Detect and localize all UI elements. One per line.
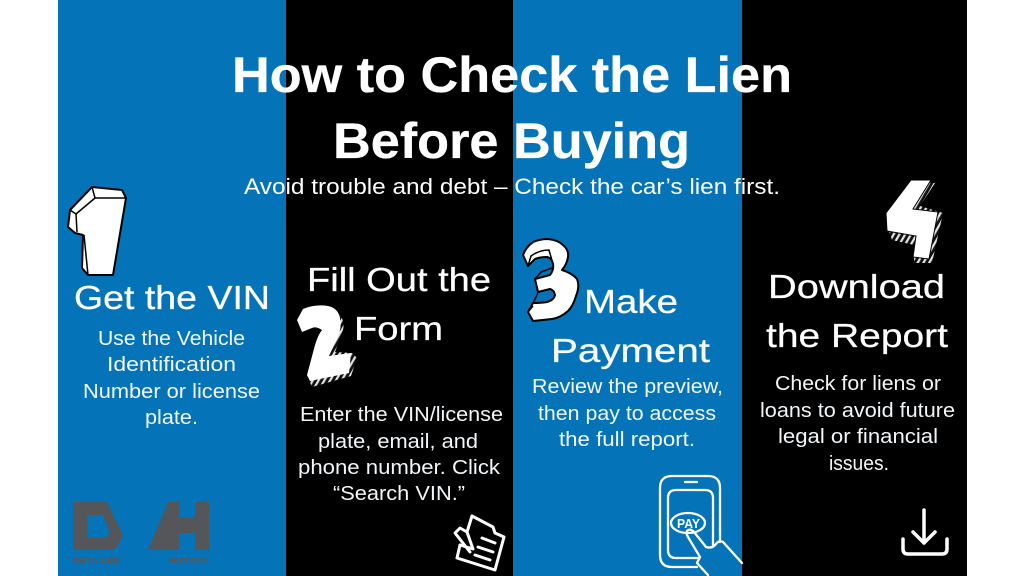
heading: Fill Out the Form — [307, 262, 491, 348]
text: step 4 description: issues. — [829, 452, 889, 475]
text: step 2 description: plate, email, and — [318, 430, 478, 453]
panel: step 4 content — [760, 180, 955, 554]
text: step 1 description: plate. — [145, 406, 198, 429]
icon: download — [903, 510, 947, 554]
text: step 1 description: Use the Vehicle — [98, 327, 245, 350]
text: step 4 description: legal or financial — [778, 425, 938, 448]
icon: number 3 — [523, 239, 578, 321]
text: step 2 description: phone number. Click — [298, 456, 501, 479]
heading: Download the Report: Download — [768, 269, 945, 306]
panel: step 3 background — [513, 0, 742, 576]
text: step 1 description: Number or license — [83, 380, 260, 403]
text: step 1 description — [83, 327, 260, 429]
title — [232, 47, 792, 169]
icon: documents — [455, 516, 504, 570]
heading: Fill Out the Form: Fill Out the — [307, 262, 491, 299]
text: step 3 description: the full report. — [559, 428, 695, 451]
text: step 1 description: Identification — [107, 353, 236, 376]
heading: Download the Report: the Report — [766, 318, 949, 355]
panel: step 1 background — [58, 0, 286, 576]
icon: number 1 — [68, 187, 126, 275]
text: step 3 description — [532, 375, 723, 451]
text: step 3 description: then pay to access — [538, 402, 716, 425]
text: step 4 description: loans to avoid future — [760, 399, 955, 422]
panel: step 2 background — [286, 0, 513, 576]
heading: Fill Out the Form: Form — [354, 311, 443, 348]
title: Before Buying — [333, 113, 690, 169]
logo: Detailed History: DETAILED — [73, 556, 121, 565]
subtitle: Avoid trouble and debt – Check the car’s lien first. — [244, 174, 780, 199]
text: step 4 description — [760, 372, 955, 475]
text: step 3 description: Review the preview, — [532, 375, 723, 398]
text: step 2 description — [298, 403, 503, 505]
panel: step 4 background — [742, 0, 967, 576]
icon: number 4 — [886, 180, 943, 263]
panel: step 3 content — [523, 239, 742, 575]
panel: step 2 content — [297, 262, 504, 570]
heading: Get the VIN: Get the VIN — [74, 280, 270, 317]
heading: Download the Report — [766, 269, 949, 355]
title: How to Check the Lien — [232, 47, 792, 103]
logo: Detailed History: HISTORY — [169, 556, 209, 565]
logo: Detailed History — [73, 502, 209, 565]
heading: Make Payment — [551, 284, 711, 370]
icon: number 2 — [297, 305, 357, 387]
heading: Make Payment: Payment — [551, 333, 711, 370]
text: step 2 description: “Search VIN.” — [333, 482, 465, 505]
panel: step 1 content — [68, 187, 270, 565]
text: step 4 description: Check for liens or — [775, 372, 941, 395]
icon: phone with pay button: PAY — [677, 516, 700, 531]
icon: phone with pay button — [660, 476, 742, 575]
text: step 2 description: Enter the VIN/license — [300, 403, 503, 426]
heading: Make Payment: Make — [584, 284, 678, 321]
